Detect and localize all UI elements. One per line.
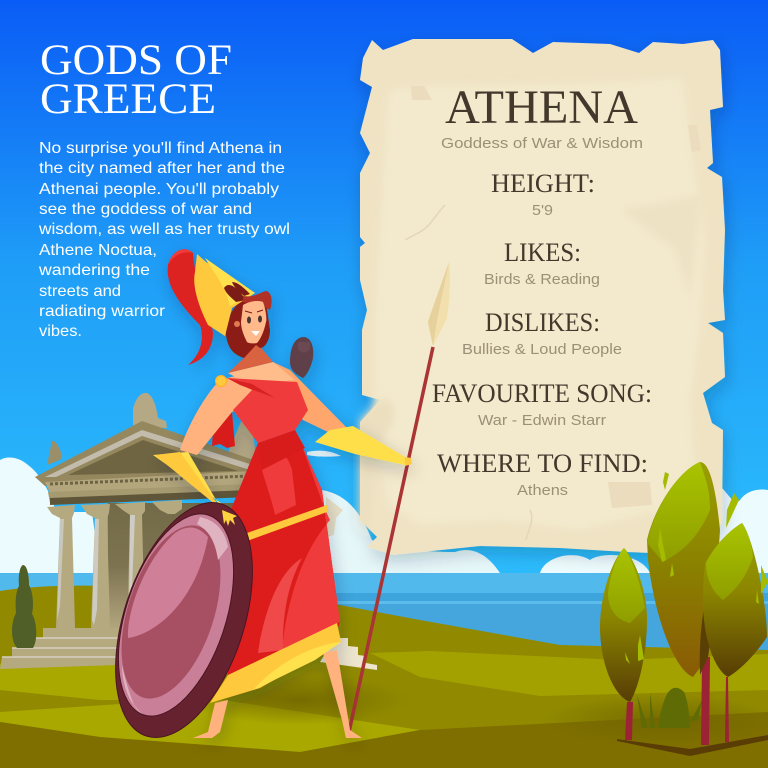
name: ATHENA [445,81,638,134]
leaves [625,472,768,664]
temple steps [0,628,128,669]
neck [228,342,273,373]
tree trunks [625,657,729,745]
temple right steps [320,638,377,670]
height value: 5'9 [532,202,553,219]
subtitle: Goddess of War & Wisdom [441,135,643,152]
intro text: wandering the [38,262,150,279]
intro text: the city named after her and the [39,160,285,177]
spear head [428,262,450,346]
small tree [600,548,647,702]
skirt [210,430,340,703]
intro text [38,140,290,340]
temple pediment [35,421,262,486]
title: GODS OF [40,37,232,84]
grass tuft [637,688,702,728]
face [234,301,266,343]
brooch [216,376,226,386]
sea [0,573,768,664]
helmet crest [194,254,255,336]
skirt hem [210,623,341,703]
left hand [222,510,237,526]
title: GREECE [40,76,216,123]
intro text: radiating warrior [39,303,166,320]
waist [258,430,305,470]
ground: hills [0,586,768,768]
likes heading: LIKES: [504,238,581,267]
clouds [0,451,768,573]
sash [212,412,235,448]
intro text: wisdom, as well as her trusty owl [38,221,290,238]
cypress tree [12,565,36,648]
trees [600,462,768,756]
temple rear wall [108,503,238,629]
intro text: Athenai people. You'll probably [39,181,279,198]
favourite song heading: FAVOURITE SONG: [432,379,652,408]
arms [180,372,262,455]
favourite song value: War - Edwin Starr [478,412,606,429]
plume [168,249,213,365]
temple roof statue [133,393,167,428]
tree shadow [617,735,768,756]
parchment scroll [360,39,725,555]
profile text [432,81,652,499]
intro text: No surprise you'll find Athena in [39,140,282,157]
intro text: Athene Noctua, [39,242,157,259]
belt [247,505,327,541]
intro text: see the goddess of war and [39,201,252,218]
intro text: vibes. [39,323,82,340]
dislikes value: Bullies & Loud People [462,341,622,358]
where to find heading: WHERE TO FIND: [437,449,648,478]
spear shaft [349,347,433,732]
where to find value: Athens [517,482,568,499]
dress bodice [227,378,308,443]
shield [89,485,279,755]
large tree [647,462,720,677]
shield highlight [128,527,208,638]
Athena figure [153,249,412,738]
legs and feet [193,650,362,738]
temple columns [47,500,182,628]
temple [0,393,377,670]
right hand [405,457,412,466]
height heading: HEIGHT: [491,169,595,198]
hair bun [243,291,272,310]
dislikes heading: DISLIKES: [485,308,600,337]
helmet band [224,282,250,302]
owl [290,337,313,378]
left sleeve [153,452,228,510]
right tree [703,523,767,677]
hair [226,300,270,358]
right sleeve [315,426,405,465]
intro text: streets and [39,283,121,300]
title [40,37,232,123]
likes value: Birds & Reading [484,271,600,288]
